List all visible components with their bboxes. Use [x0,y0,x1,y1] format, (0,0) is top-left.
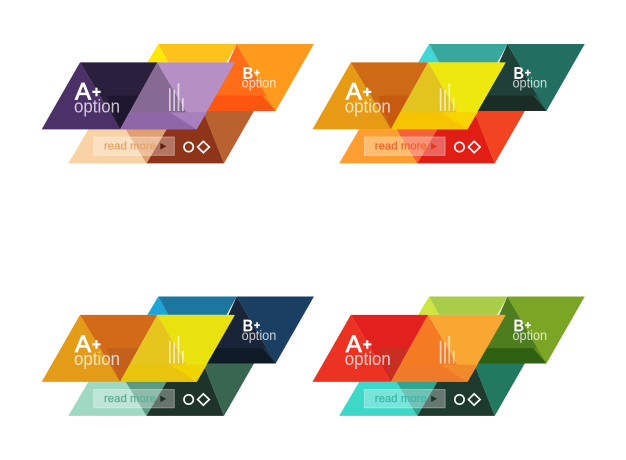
button: read more [364,389,445,408]
icons: circle and diamond [184,394,209,405]
label: A+ option: A [75,331,91,358]
button: read more: read more [104,141,156,153]
label: B+ option [512,318,547,343]
label: B+ option [512,65,547,91]
label: A+ option: + [363,336,372,353]
label: B+ option: B [513,65,524,82]
label: B+ option: B [243,318,253,335]
panel: B option parallelogram [147,296,314,363]
label: B+ option: B [513,318,524,335]
label: A+ option: + [363,84,372,101]
label: B+ option: option [242,328,276,343]
icons: circle and diamond [455,141,480,153]
label: B+ option [242,318,276,343]
infographic: purple and orange option panel [42,44,314,163]
label: B+ option: option [512,76,547,91]
icons: circle and diamond [455,394,480,405]
panel: A option parallelogram [312,315,506,382]
icon: bar chart [440,336,454,363]
icon: bar chart [169,83,184,111]
button: read more [94,137,174,155]
panel: A option parallelogram [312,62,506,129]
panel: A option parallelogram [42,62,235,129]
icon: bar chart [169,336,184,363]
panel: A option parallelogram [42,315,235,382]
label: B+ option: option [512,328,547,343]
icon: bar chart [440,83,454,111]
panel: lower parallelogram [68,111,254,163]
panel: lower parallelogram [339,111,525,163]
panel: lower parallelogram [339,363,525,416]
label: B+ option: + [254,320,260,332]
panel: lower parallelogram [68,363,254,416]
infographic: orange and navy option panel [42,296,314,416]
label: B+ option: + [525,320,531,332]
label: B+ option: + [525,67,531,79]
button: read more: read more [375,141,427,153]
label: B+ option: + [254,67,260,79]
button: read more [364,137,445,155]
infographic: red and green option panel [312,296,585,416]
button: read more: read more [375,393,427,405]
label: A+ option: A [346,78,362,105]
label: A+ option: + [92,336,101,353]
label: A+ option [74,78,120,116]
label: B+ option: B [243,65,253,82]
label: A+ option: + [92,84,101,101]
button: read more: read more [104,393,156,405]
panel: B option parallelogram [147,44,314,111]
label: B+ option [242,65,276,91]
icons: circle and diamond [184,141,209,153]
label: A+ option: option [74,348,120,369]
label: A+ option [74,331,120,369]
label: A+ option [345,331,391,369]
label: A+ option [345,78,391,116]
infographic: orange and teal option panel [312,44,585,163]
panel: B option parallelogram [418,296,585,363]
label: A+ option: option [345,348,391,369]
label: A+ option: A [346,331,362,358]
label: A+ option: option [74,95,120,116]
label: A+ option: A [75,78,91,105]
label: A+ option: option [345,95,391,116]
label: B+ option: option [242,76,276,91]
panel: B option parallelogram [418,44,585,111]
button: read more [94,389,174,408]
